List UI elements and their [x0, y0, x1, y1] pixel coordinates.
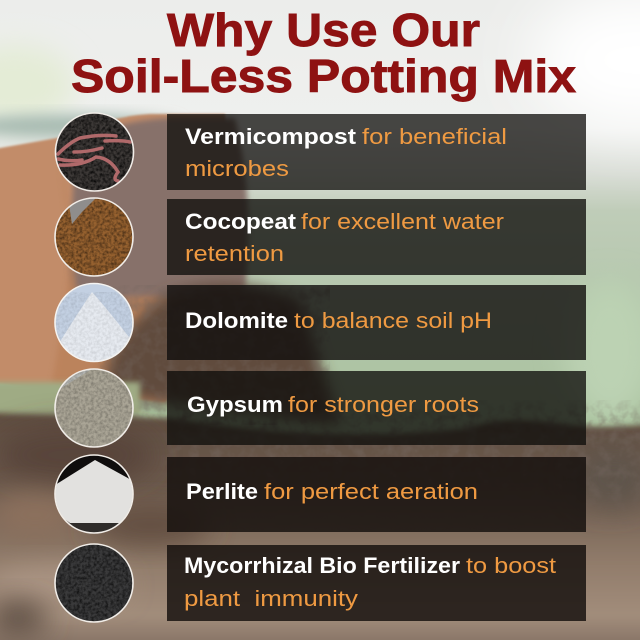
panel: gypsum — [167, 371, 586, 445]
icon: gypsum — [55, 369, 135, 447]
panel: vermicompost: microbes — [185, 156, 289, 181]
title: Soil-Less Potting Mix — [71, 50, 576, 102]
panel: vermicompost: Vermicompost — [185, 124, 357, 149]
icon: dolomite powder — [55, 283, 135, 362]
panel: cocopeat: retention — [185, 241, 284, 266]
panel: cocopeat: Cocopeat — [185, 209, 297, 234]
panel: dolomite: to balance soil pH — [294, 308, 492, 333]
icon: vermicompost worms — [55, 113, 135, 191]
icon: cocopeat — [55, 198, 135, 276]
icon: mycorrhizal fertilizer — [55, 544, 135, 622]
panel: dolomite: Dolomite — [185, 308, 288, 333]
panel: vermicompost — [167, 114, 586, 190]
title — [71, 4, 576, 102]
panel: mycorrhizal bio fertilizer: plant immunity — [184, 586, 358, 611]
panel: perlite — [167, 457, 586, 532]
title: Why Use Our — [167, 4, 480, 56]
panel: gypsum: Gypsum — [187, 392, 283, 417]
panel: dolomite — [167, 285, 586, 360]
panel: cocopeat — [167, 199, 586, 275]
panel: mycorrhizal bio fertilizer: to boost — [466, 553, 556, 578]
panel: gypsum: for stronger roots — [288, 392, 479, 417]
panel: mycorrhizal bio fertilizer: Mycorrhizal Bio Fertilizer — [184, 553, 460, 578]
panel: perlite: for perfect aeration — [264, 479, 478, 504]
panel: perlite: Perlite — [186, 479, 258, 504]
panel: vermicompost: for beneficial — [362, 124, 507, 149]
icon: perlite — [55, 455, 135, 533]
panel: cocopeat: for excellent water — [301, 209, 504, 234]
panel: mycorrhizal bio fertilizer — [167, 545, 586, 621]
